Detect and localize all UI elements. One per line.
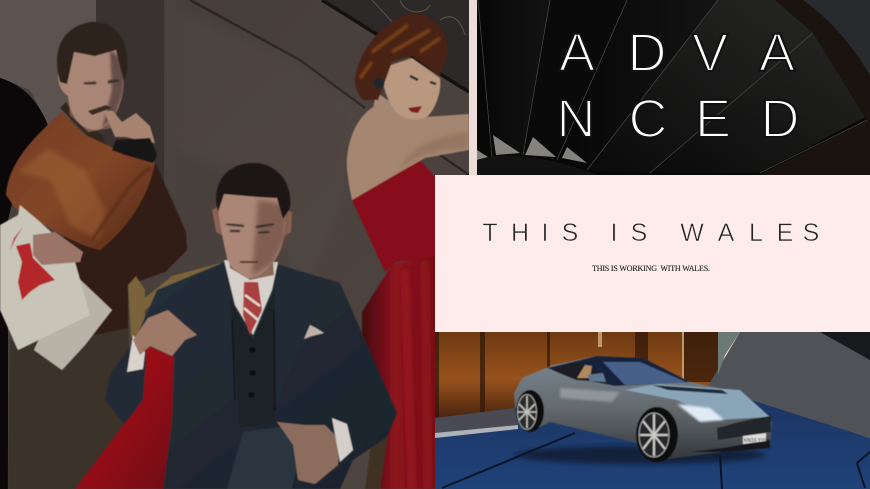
neck [373, 94, 396, 112]
rear spokes [518, 396, 536, 428]
pavement glare [435, 425, 518, 438]
headlight [677, 404, 724, 422]
plate text: KN16 YYH [744, 438, 768, 444]
vertical moulding [165, 0, 176, 200]
grille [717, 416, 771, 440]
front rim [639, 413, 669, 457]
fashion sketch [10, 227, 55, 300]
trouser knee [227, 427, 300, 489]
side panel sheen [560, 388, 620, 402]
earring [374, 78, 384, 88]
rear rim [518, 394, 536, 430]
blade 2 [523, 0, 627, 160]
hand holding cloth [133, 310, 197, 356]
hair [355, 13, 447, 100]
trousers [8, 328, 129, 489]
collar scarf [60, 102, 106, 144]
face [58, 44, 124, 130]
blade root highlights [477, 135, 587, 163]
glass stair [718, 332, 740, 375]
pocket square [304, 325, 324, 339]
skirt fold [405, 262, 428, 489]
dark wall section [96, 0, 164, 200]
lips [408, 106, 422, 113]
striped tie [243, 282, 262, 335]
bonnet vent [652, 385, 728, 394]
figure: seated man [75, 163, 397, 489]
upper stair moulding [190, 0, 469, 175]
knit cuff [112, 138, 157, 163]
eyes [410, 76, 436, 84]
panel: portrait photo [0, 0, 469, 489]
rear wheel [516, 390, 544, 432]
dark arch [0, 78, 48, 489]
panel: pink text card [435, 175, 870, 332]
lips [240, 261, 258, 263]
turbine background [477, 0, 870, 175]
car shadow [515, 446, 765, 464]
panel: turbine image with headline [477, 0, 870, 175]
number plate [743, 433, 768, 444]
blue floor [435, 386, 870, 489]
hair [57, 22, 127, 84]
figure: standing man [0, 22, 187, 489]
leather jacket [6, 112, 155, 250]
face shadow [252, 200, 288, 276]
shirt collar [224, 260, 278, 335]
dark lower jacket [60, 162, 187, 340]
chair frame [128, 263, 222, 340]
eyes [84, 80, 119, 84]
dress bodice [352, 158, 436, 272]
lighter stair wall [176, 8, 365, 300]
red silk cloth [75, 346, 174, 489]
back and arm [347, 104, 469, 200]
headline: ADVANCED: ADVA [559, 23, 795, 83]
suit jacket [105, 263, 397, 489]
front tyre [636, 407, 678, 462]
moustache [88, 105, 112, 115]
jacket sheen [18, 148, 106, 240]
blade 4 [587, 0, 813, 173]
car body [514, 356, 772, 460]
windscreen glare [603, 362, 686, 385]
headline: ADVANCED: NCED [556, 89, 800, 149]
blade 3 [557, 0, 718, 170]
bonnet [625, 384, 770, 420]
blade 5 [650, 33, 865, 173]
neck [228, 250, 274, 280]
arm shadow [400, 132, 469, 170]
eyes [226, 224, 274, 233]
blade edges [478, 0, 867, 173]
face [218, 192, 286, 278]
front wheel [636, 407, 678, 462]
sketch figure [16, 243, 55, 300]
hair highlights [360, 25, 440, 78]
chair right leg [365, 437, 388, 489]
hub [477, 156, 597, 175]
wall background [0, 0, 469, 489]
drawing paper [0, 205, 90, 350]
dark corner [820, 332, 870, 360]
front spokes [640, 414, 668, 456]
concrete slope [708, 332, 870, 438]
light upper left wall [0, 0, 100, 125]
rear tyre [516, 390, 544, 432]
sketch streak [10, 227, 23, 250]
stair banister line [322, 0, 469, 92]
card background [435, 175, 870, 332]
door mirror [587, 373, 606, 382]
face [382, 58, 440, 119]
heading: this is wales: THISISWALES [482, 219, 819, 247]
hand at mouth [104, 111, 155, 143]
casing corner [760, 0, 870, 175]
tie stripes [244, 295, 260, 320]
dotted casing ring [803, 0, 870, 75]
tan seat [577, 365, 592, 378]
pavement [435, 408, 518, 434]
dress skirt [362, 252, 436, 489]
railing scrollwork [372, 0, 465, 35]
floor lines [442, 433, 870, 489]
shirt cuff [332, 418, 353, 462]
roof [547, 356, 690, 386]
neck [68, 104, 112, 132]
lower bumper [690, 440, 770, 452]
hair [216, 163, 290, 219]
orange wall [435, 332, 720, 418]
panel: car photo [435, 332, 870, 489]
waistcoat [230, 290, 275, 428]
lapels [185, 265, 320, 410]
car [514, 356, 772, 462]
waistcoat buttons [251, 350, 253, 395]
paper stack [34, 270, 112, 370]
hand at waist [33, 232, 83, 265]
arm crease [92, 168, 150, 240]
pale columns [598, 332, 684, 382]
lapel edges [232, 310, 275, 410]
white cuff [127, 335, 145, 372]
subheading: THIS IS WORKING WITH WALES. [592, 264, 710, 273]
figure: woman in red dress [347, 13, 469, 489]
face shadow [102, 50, 125, 128]
ears [212, 206, 292, 238]
wall dark bands [435, 332, 718, 418]
plate background [743, 433, 766, 444]
staircase railing [322, 0, 469, 92]
blade 1 [478, 0, 550, 157]
hand on knee [277, 422, 340, 484]
side window [552, 362, 606, 382]
